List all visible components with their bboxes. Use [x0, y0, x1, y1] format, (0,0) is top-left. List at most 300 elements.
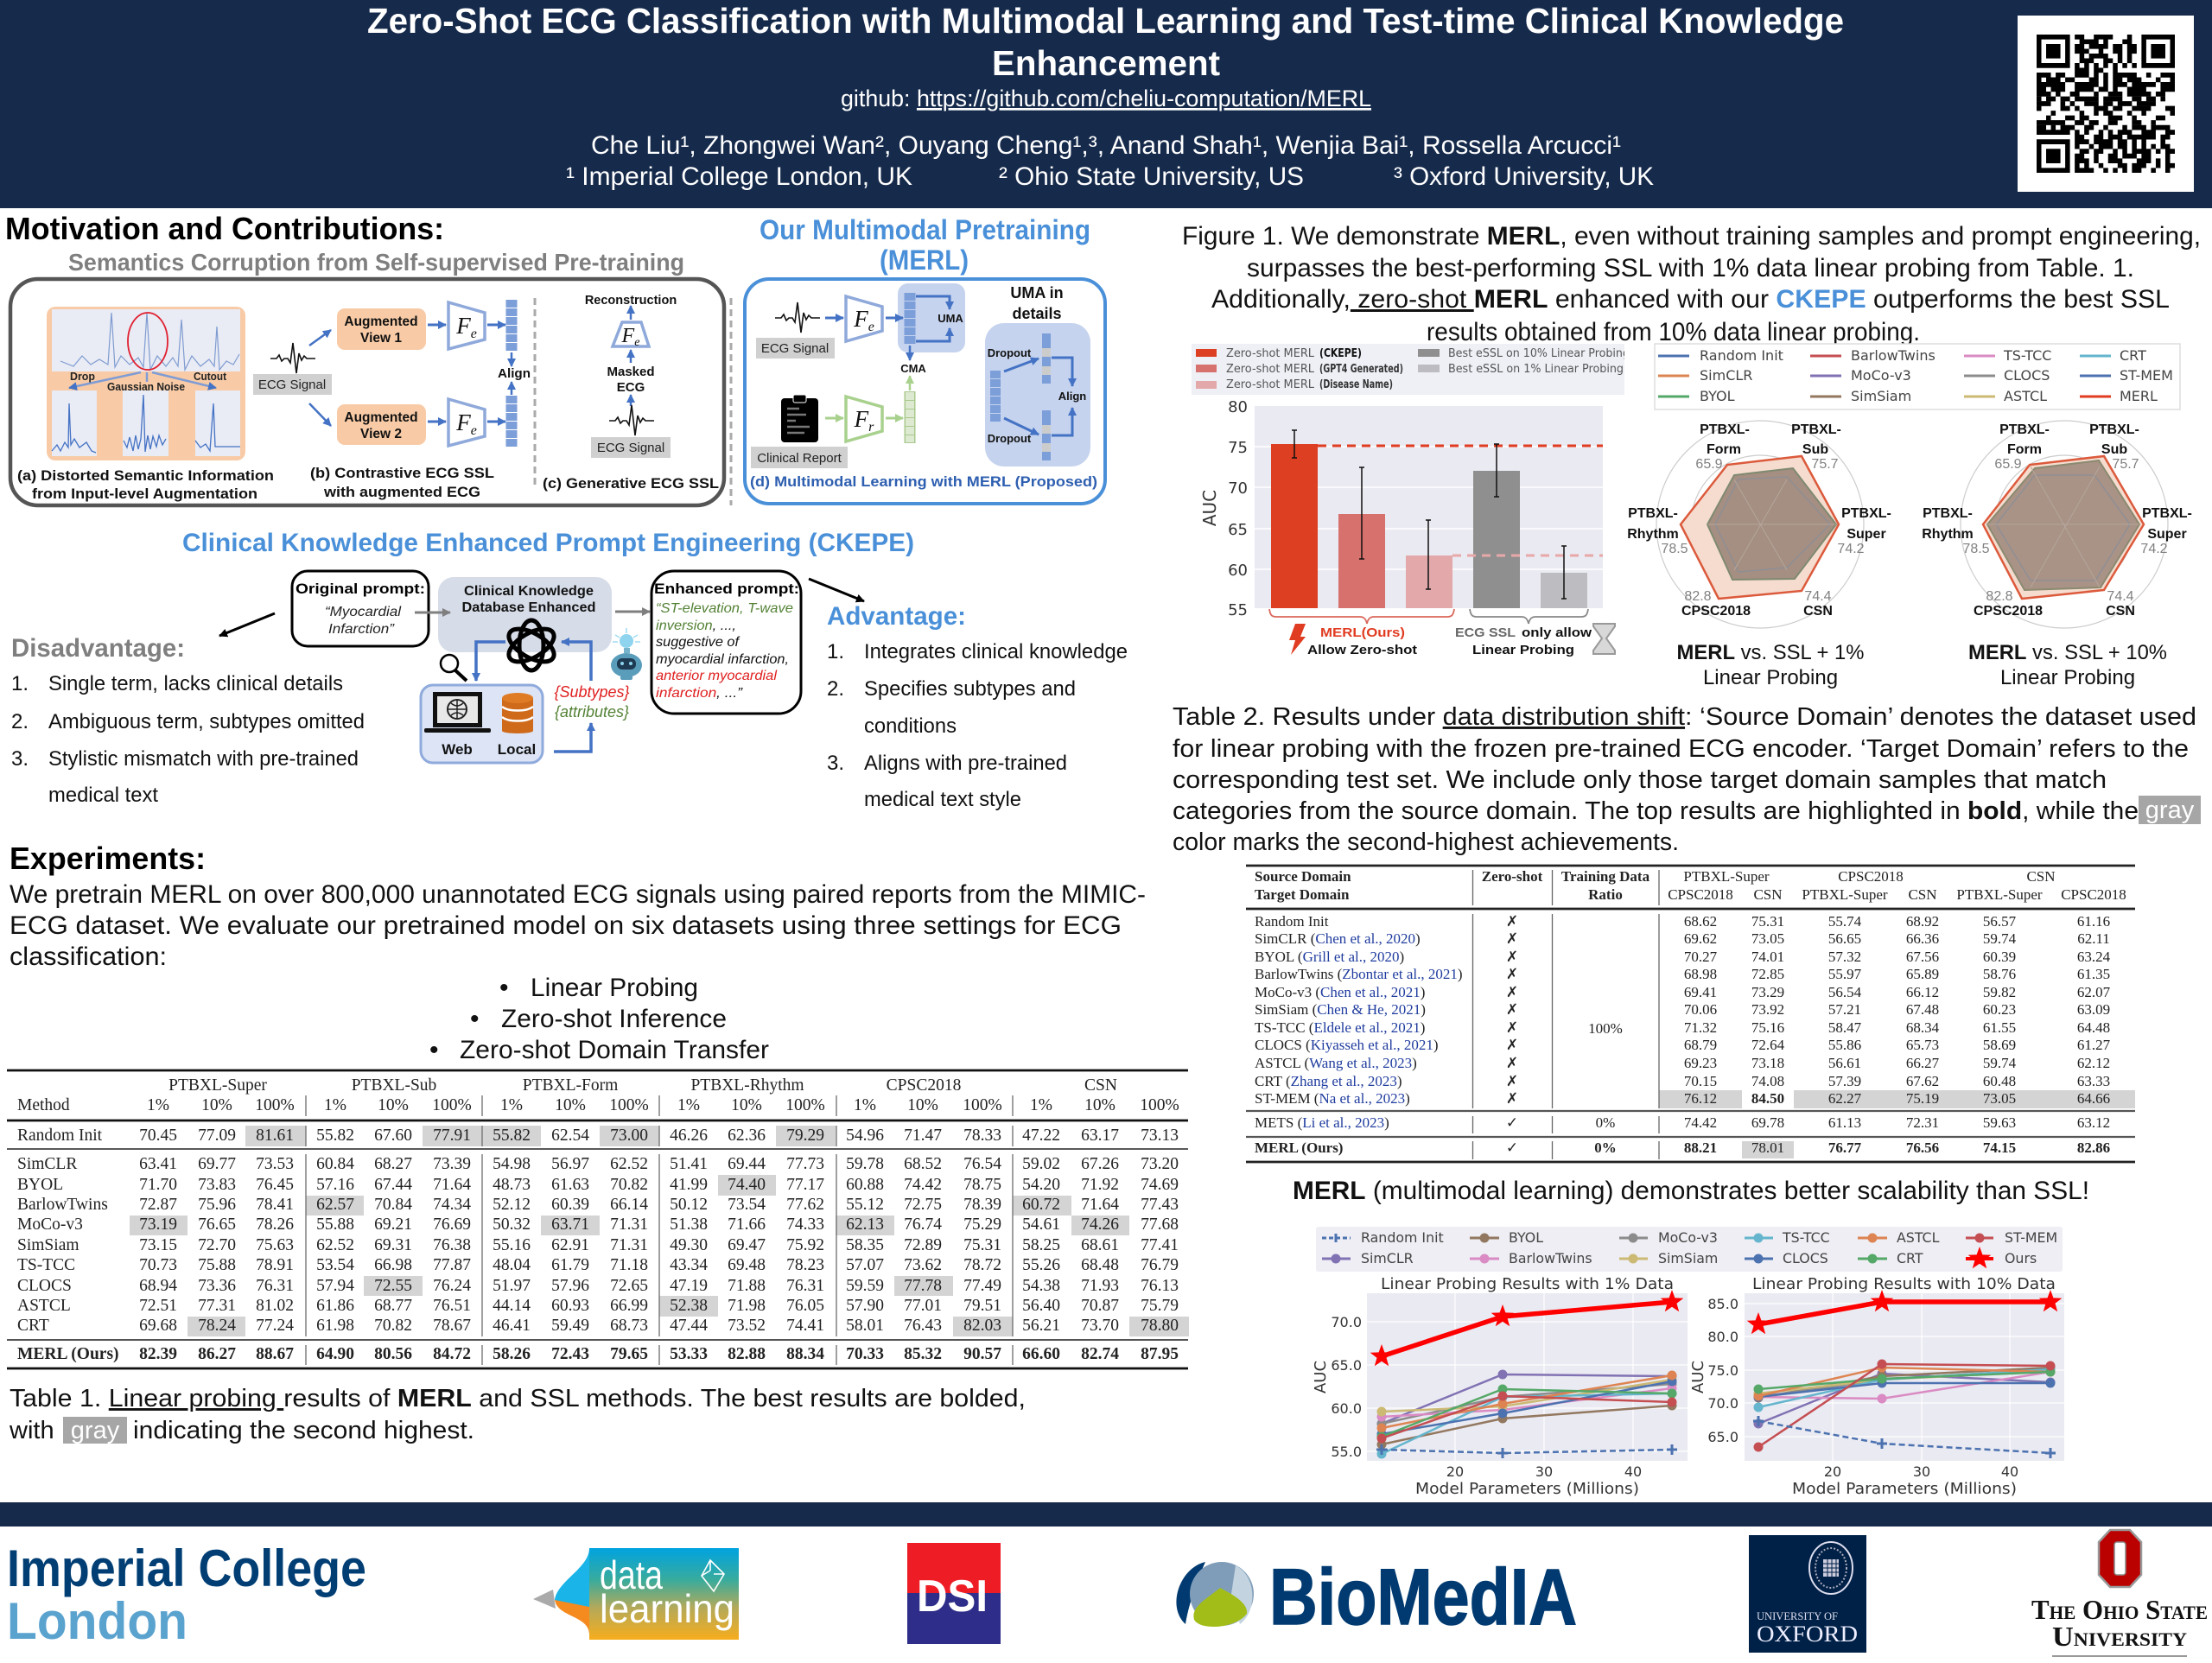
row: CRT: 59.49: [551, 1317, 589, 1335]
sub-panel (b) contrastive ECG SSL: e: [471, 423, 477, 438]
arrow to advantages: [809, 579, 864, 601]
row: MERL (ours): 58.26: [493, 1345, 531, 1363]
row: SimSiam: 72.70: [198, 1236, 236, 1254]
row: MoCo-v3: 69.21: [374, 1216, 412, 1234]
table 2 rows: BYOL (Grill et al., 2020): [1255, 949, 1404, 965]
row: MoCo-v3: 62.13: [846, 1216, 884, 1234]
table 2 header: Target Domain: [1255, 886, 1350, 903]
row: ASTCL: 77.01: [904, 1297, 942, 1315]
scalability chart legend: Random Init: [1361, 1229, 1444, 1246]
panel: multimodal learning with MERL: [745, 279, 1105, 504]
report encoder: r: [868, 420, 874, 435]
row: CLOCS: 71.93: [1081, 1277, 1119, 1295]
radar labels: Form: [2007, 442, 2042, 457]
UMA in details: Align: [1058, 390, 1086, 403]
table 2 rows: 69.62: [1684, 930, 1717, 947]
row: SimSiam: 58.35: [846, 1236, 884, 1254]
figure 1 caption: results obtained from 10% data linear probing.: [1427, 318, 1920, 346]
row: SimCLR: 68.52: [904, 1155, 942, 1173]
table 2 rows: 84.50: [1751, 1090, 1784, 1107]
row: CLOCS: 77.49: [963, 1277, 1001, 1295]
radar labels: Sub: [1802, 442, 1828, 457]
row: MoCo-v3: 71.66: [728, 1216, 766, 1234]
radar labels: Super: [1847, 527, 1886, 542]
row: ASTCL: 70.87: [1081, 1297, 1119, 1315]
poster title: [367, 1, 1844, 83]
table 2 header: CPSC2018: [1838, 868, 1904, 885]
icon: hourglass: [1593, 624, 1615, 654]
disadvantage list: Stylistic mismatch with pre-trained: [48, 747, 359, 771]
row: CRT: 78.24: [198, 1317, 236, 1335]
row: CRT: 78.80: [1141, 1317, 1179, 1335]
disadvantage list: 3.: [11, 747, 29, 771]
row: MERL (ours): 80.56: [374, 1345, 412, 1363]
row: BYOL: 70.82: [610, 1176, 648, 1194]
web and local sources: Web: [442, 741, 473, 758]
table 2 rows: ✗: [1506, 1055, 1518, 1072]
radar legend: ST-MEM: [2120, 367, 2173, 384]
row: MERL (ours): 82.88: [728, 1345, 766, 1363]
row: TS-TCC: 78.72: [963, 1256, 1001, 1274]
clinical report label: Clinical Report: [757, 451, 842, 466]
row: CRT: 77.24: [256, 1317, 294, 1335]
table 2 header: CSN: [1908, 886, 1937, 903]
row: BYOL: 74.69: [1141, 1176, 1179, 1194]
radar labels: [1627, 422, 1891, 619]
table 2 MERL row: ✓: [1506, 1139, 1518, 1157]
table 2 rows: 69.78: [1751, 1114, 1784, 1131]
radar caption 1%: Linear Probing: [1703, 666, 1838, 689]
bar chart legend: Zero-shot MERL: [1226, 363, 1315, 376]
table 2 rows: 67.62: [1906, 1073, 1939, 1089]
diagram: CKEPE workflow: [219, 571, 864, 763]
table 2 rows: 56.54: [1828, 984, 1862, 1000]
row: random init: 55.82: [316, 1127, 354, 1145]
radar labels: PTBXL-: [1628, 506, 1678, 521]
row: BYOL: 71.64: [433, 1176, 471, 1194]
row: CLOCS: 71.88: [728, 1277, 766, 1295]
row: SimSiam: 69.47: [728, 1236, 766, 1254]
row: MoCo-v3: 63.71: [551, 1216, 589, 1234]
row: MERL (ours): 82.74: [1081, 1345, 1119, 1363]
table 2 rows: 61.35: [2077, 966, 2110, 982]
subtypes and attributes labels: {attributes}: [555, 703, 629, 720]
radar legend: SimSiam: [1851, 388, 1911, 404]
enhanced prompt box: anterior myocardial: [656, 669, 777, 683]
table 2 rows: 60.39: [1983, 949, 2016, 965]
bar chart legend: (Disease Name): [1319, 378, 1393, 391]
row: MoCo-v3: 51.38: [670, 1216, 708, 1234]
row: TS-TCC: 78.91: [256, 1256, 294, 1274]
row: CLOCS: CLOCS: [17, 1277, 72, 1295]
footer bar: [0, 1502, 2212, 1527]
header rows: 100%: [432, 1096, 472, 1114]
advantage list: 3.: [827, 752, 844, 775]
icon: database: [502, 693, 533, 733]
row: CLOCS: 68.94: [139, 1277, 177, 1295]
table 2 header: Ratio: [1588, 886, 1623, 903]
report encoder: F: [855, 406, 868, 432]
bar chart group labels: Linear Probing: [1472, 643, 1574, 657]
table 1: linear probing results: [7, 1070, 1189, 1368]
table 2 rows: 57.21: [1828, 1001, 1861, 1018]
experiment settings bullets: Linear Probing: [531, 974, 698, 1002]
table 2 rows: ASTCL (Wang et al., 2023): [1255, 1055, 1417, 1071]
radar labels: PTBXL-: [1999, 422, 2050, 437]
row: MERL (ours): 88.34: [786, 1345, 824, 1363]
table 2 rows: 69.41: [1684, 984, 1717, 1000]
table 1 caption: Table 1. Linear probing results of MERL and SSL methods. The best results are bolded,: [10, 1385, 1026, 1412]
original prompt box: Original prompt:: [296, 581, 425, 597]
header rows: 10%: [555, 1096, 586, 1114]
row: SimCLR: 59.78: [846, 1155, 884, 1173]
table 2 rows: 75.19: [1906, 1090, 1939, 1107]
radar legend: SimCLR: [1700, 367, 1752, 384]
affiliations: ² Ohio State University, US: [999, 162, 1304, 191]
table 2 header: PTBXL-Super: [1956, 886, 2043, 903]
row: MoCo-v3: 76.69: [433, 1216, 471, 1234]
axes labels: 40: [1624, 1463, 1642, 1480]
radar labels: 82.8: [1986, 589, 2013, 604]
row: MoCo-v3: 77.68: [1141, 1216, 1179, 1234]
sub-panel (b) contrastive ECG SSL: View 1: [360, 331, 402, 346]
row: MERL (ours): 72.43: [551, 1345, 589, 1363]
row: BYOL: 67.44: [374, 1176, 412, 1194]
brackets: [1269, 609, 1588, 624]
disadvantage list: [11, 634, 365, 807]
row: BYOL: 71.70: [139, 1176, 177, 1194]
row: SimCLR: 73.20: [1141, 1155, 1179, 1173]
table 2 header: [1255, 868, 2126, 903]
row: random init: 62.36: [728, 1127, 766, 1145]
table 2 header: PTBXL-Super: [1802, 886, 1888, 903]
row: MERL (ours): 88.67: [256, 1345, 294, 1363]
header rows: Method: [17, 1096, 70, 1114]
scalability chart legend: Ours: [2005, 1250, 2037, 1266]
ECG encoder: [825, 293, 910, 344]
table 2 rows: 73.29: [1751, 984, 1784, 1000]
row: SimCLR: 63.41: [139, 1155, 177, 1173]
table 2 rows: 59.74: [1983, 1055, 2017, 1071]
row: CLOCS: 72.55: [374, 1277, 412, 1295]
logo: Imperial College London: Imperial College: [7, 1539, 366, 1597]
QR code: [2018, 16, 2194, 192]
table 2 rows: 60.23: [1983, 1001, 2016, 1018]
CMA block: CMA: [900, 362, 926, 375]
second-highest gray cells: [130, 1126, 1189, 1336]
radar labels: 75.7: [1811, 457, 1839, 472]
row: TS-TCC: 68.48: [1081, 1256, 1119, 1274]
row: MERL (ours): 64.90: [316, 1345, 354, 1363]
table 2 rows: 60.48: [1983, 1073, 2016, 1089]
table 2 rows: 61.13: [1828, 1114, 1861, 1131]
table 2 header: Zero-shot: [1482, 868, 1543, 885]
row: MoCo-v3: 71.31: [610, 1216, 648, 1234]
advantage list: [827, 602, 1128, 811]
row: TS-TCC: 77.87: [433, 1256, 471, 1274]
table 2 rows: METS (Li et al., 2023): [1255, 1114, 1389, 1131]
sub-panel (a) distorted semantics: Drop: [70, 370, 95, 383]
table 2 header: CSN: [1753, 886, 1783, 903]
row: BYOL: 74.42: [904, 1176, 942, 1194]
table 2 rows: 0%: [1596, 1114, 1615, 1131]
scalability chart legend: ASTCL: [1897, 1229, 1940, 1246]
radar caption 10%: Linear Probing: [2000, 666, 2135, 689]
y axis: 55: [1228, 601, 1248, 619]
icon: lightning bolt: [1289, 624, 1306, 655]
table 2 rows: 62.07: [2077, 984, 2111, 1000]
table 2 rows: [1255, 913, 2111, 1132]
row: SimCLR: SimCLR: [17, 1155, 77, 1173]
table 1 caption: with: [9, 1417, 54, 1444]
table 2 rows: 75.16: [1751, 1019, 1784, 1036]
table 2 MERL row: 76.56: [1906, 1139, 1939, 1156]
row: CRT: 61.98: [316, 1317, 354, 1335]
table 2 rows: 67.48: [1906, 1001, 1939, 1018]
data series: [1376, 1302, 1677, 1458]
UMA in details: UMA in: [1010, 284, 1064, 301]
header rows: 100%: [963, 1096, 1002, 1114]
row: BarlowTwins: 50.12: [670, 1196, 708, 1214]
gray arrows: [415, 612, 650, 613]
row: CRT: 68.73: [610, 1317, 648, 1335]
row: BarlowTwins: 60.39: [551, 1196, 589, 1214]
row: BarlowTwins: [17, 1196, 1179, 1214]
table 2 header: CPSC2018: [1668, 886, 1733, 903]
row: CLOCS: 72.65: [610, 1277, 648, 1295]
scalability chart legend: SimSiam: [1658, 1250, 1718, 1266]
row: random init: 81.61: [256, 1127, 294, 1145]
experiments paragraph: classification:: [10, 943, 167, 971]
sub-panel (c) generative ECG SSL: ECG: [617, 380, 645, 395]
table 2 rows: 55.74: [1828, 913, 1862, 930]
row: SimCLR: 69.44: [728, 1155, 766, 1173]
header rows: 10%: [201, 1096, 232, 1114]
table 2 rows: 75.31: [1751, 913, 1784, 930]
scalability chart legend: ST-MEM: [2005, 1229, 2057, 1246]
radar labels: CSN: [2106, 604, 2135, 619]
row: BarlowTwins: 75.96: [198, 1196, 236, 1214]
clinical knowledge database: Database Enhanced: [461, 600, 596, 615]
axes labels: 20: [1824, 1463, 1841, 1480]
row: SimSiam: 62.52: [316, 1236, 354, 1254]
table 2 caption: Table 2. Results under data distribution shift : ‘Source Domain’ denotes the dataset used: [1173, 703, 2196, 731]
row: CLOCS: 47.19: [670, 1277, 708, 1295]
row: ASTCL: 52.38: [670, 1297, 708, 1315]
table 2 rows: 63.24: [2077, 949, 2111, 965]
table 2 header: PTBXL-Super: [1683, 868, 1770, 885]
table 2 rows: 61.16: [2077, 913, 2110, 930]
table 2 MERL row: 0%: [1594, 1139, 1617, 1156]
experiment settings bullets: •: [470, 1005, 480, 1033]
row: SimSiam: 69.31: [374, 1236, 412, 1254]
radar labels: Rhythm: [1627, 527, 1679, 542]
row: SimCLR: 51.41: [670, 1155, 708, 1173]
row: CRT: 73.52: [728, 1317, 766, 1335]
figure 1 caption: Figure 1. We demonstrate MERL, even without training samples and prompt engineering,: [1182, 222, 2201, 251]
table 2 MERL row: [1255, 1139, 2110, 1157]
row: CRT: 74.41: [786, 1317, 824, 1335]
caption (b): (b) Contrastive ECG SSL: [310, 465, 494, 481]
gray cells: [1659, 1090, 2135, 1158]
row: CRT: 73.70: [1081, 1317, 1119, 1335]
UMA in details: Dropout: [988, 346, 1032, 359]
row: ASTCL: 71.98: [728, 1297, 766, 1315]
line chart: linear probing with 10% data: [1689, 1276, 2064, 1498]
header rows: 100%: [255, 1096, 295, 1114]
row: ASTCL: 60.93: [551, 1297, 589, 1315]
icon: OpenAI knot: [504, 620, 559, 670]
row: SimCLR: [17, 1155, 1179, 1173]
row: ASTCL: ASTCL: [17, 1297, 71, 1315]
row: random init: 55.82: [493, 1127, 531, 1145]
logo: The Ohio State University: University: [2052, 1621, 2187, 1652]
row: BarlowTwins: 62.57: [316, 1196, 354, 1214]
row: BYOL: 54.20: [1022, 1176, 1060, 1194]
header rows: 1%: [147, 1096, 169, 1114]
advantage list: Advantage:: [827, 602, 966, 631]
row: SimCLR: 67.26: [1081, 1155, 1119, 1173]
table 2 rows: ✗: [1506, 984, 1518, 1001]
bar chart legend: Best eSSL on 1% Linear Probing: [1448, 363, 1624, 376]
radar caption 10%: [1968, 641, 2167, 689]
table 2 rows: 66.27: [1906, 1055, 1940, 1071]
radar legend: TS-TCC: [2003, 347, 2051, 364]
table 2 rows: 74.01: [1751, 949, 1784, 965]
row: SimSiam: 71.31: [610, 1236, 648, 1254]
header rows: 100%: [1140, 1096, 1179, 1114]
ECG signal input: ECG Signal: [761, 341, 829, 356]
enhanced prompt box: infarction , ...”: [656, 686, 743, 701]
row: ASTCL: 76.05: [786, 1297, 824, 1315]
row: random init: 54.96: [846, 1127, 884, 1145]
row: MERL (ours): 53.33: [670, 1345, 708, 1363]
row: MERL (ours): [17, 1345, 1179, 1363]
logo: data learning: learning: [600, 1586, 734, 1631]
panel: self-supervised approaches: [10, 279, 724, 505]
authors: Che Liu¹, Zhongwei Wan², Ouyang Cheng¹,³, Anand Shah¹, Wenjia Bai¹, Rossella Arcucci¹: [591, 131, 1621, 160]
axes labels: 55.0: [1331, 1444, 1362, 1460]
heading: our multimodal pretraining: [760, 214, 1090, 276]
advantage list: 1.: [827, 640, 844, 663]
sub-panel (b) contrastive ECG SSL: Augmented: [344, 314, 418, 329]
experiment settings bullets: [429, 974, 769, 1064]
icon: clinical report clipboard: [781, 395, 818, 442]
row: ASTCL: 61.86: [316, 1297, 354, 1315]
table 2 rows: 69.23: [1684, 1055, 1717, 1071]
table 2 ratio cell: 100%: [1588, 1020, 1623, 1037]
radar labels: 74.4: [2107, 589, 2134, 604]
row: MoCo-v3: 74.33: [786, 1216, 824, 1234]
axes labels: 80.0: [1707, 1329, 1738, 1345]
row: MoCo-v3: 50.32: [493, 1216, 531, 1234]
sub-panel (b) contrastive ECG SSL: ECG Signal: [258, 378, 326, 392]
experiments paragraph: ECG dataset. We evaluate our pretrained model on six datasets using three settings for ECG: [10, 911, 1122, 940]
row: TS-TCC: 70.73: [139, 1256, 177, 1274]
radar legend: MoCo-v3: [1851, 367, 1911, 384]
row: CRT: 56.21: [1022, 1317, 1060, 1335]
radar chart: MERL vs SSL + 1%: [1627, 421, 1891, 628]
clinical knowledge database: [438, 577, 612, 652]
row: TS-TCC: 69.48: [728, 1256, 766, 1274]
radar labels: CPSC2018: [1974, 604, 2043, 619]
subheading: semantics corruption: Semantics Corruption from Self-supervised Pre-training: [68, 249, 684, 276]
row: CLOCS: [17, 1277, 1179, 1295]
scalability chart legend: BYOL: [1509, 1229, 1543, 1246]
table 2 MERL row: 88.21: [1684, 1139, 1717, 1156]
row: MERL (ours): 84.72: [433, 1345, 471, 1363]
table 2 MERL row: MERL (Ours): [1255, 1139, 1343, 1156]
table 2 MERL row: 82.86: [2077, 1139, 2110, 1156]
row: CLOCS: 51.97: [493, 1277, 531, 1295]
bar chart group labels: Allow Zero-shot: [1307, 643, 1417, 657]
table 2 rows: 59.82: [1983, 984, 2016, 1000]
table 2 rows: 76.12: [1684, 1090, 1717, 1107]
scalability chart legend: [1316, 1227, 2063, 1272]
radar labels: Rhythm: [1922, 527, 1974, 542]
github link: github: https://github.com/cheliu-computation/MERL: [841, 86, 1371, 111]
row: BarlowTwins: 60.72: [1022, 1196, 1060, 1214]
row: SimCLR: 59.02: [1022, 1155, 1060, 1173]
table 2 rows: 72.85: [1751, 966, 1784, 982]
row: CLOCS: 76.24: [433, 1277, 471, 1295]
row: TS-TCC: 71.18: [610, 1256, 648, 1274]
table 2 rows: 68.34: [1906, 1019, 1940, 1036]
clinical report label: [751, 447, 848, 468]
row: SimCLR: 77.73: [786, 1155, 824, 1173]
row: TS-TCC: 78.23: [786, 1256, 824, 1274]
table 2 rows: 59.63: [1983, 1114, 2016, 1131]
axes labels: 30: [1913, 1463, 1930, 1480]
row: MERL (ours): 90.57: [963, 1345, 1001, 1363]
UMA block: [916, 296, 963, 341]
caption (b): with augmented ECG: [323, 484, 480, 500]
scalability chart legend: CLOCS: [1783, 1250, 1828, 1266]
advantage list: Specifies subtypes and: [864, 677, 1076, 701]
y axis: 80: [1228, 398, 1248, 416]
row: SimSiam: 75.63: [256, 1236, 294, 1254]
row: ASTCL: 66.99: [610, 1297, 648, 1315]
poster title: Enhancement: [992, 43, 1220, 83]
row: ASTCL: 75.79: [1141, 1297, 1179, 1315]
logo: BioMedIA: BioMedIA: [1269, 1553, 1577, 1641]
radar labels: PTBXL-: [1700, 422, 1750, 437]
radar labels: Super: [2147, 527, 2187, 542]
table 2 rows: 68.62: [1684, 913, 1717, 930]
table 2 header: Source Domain: [1255, 868, 1351, 885]
row: MoCo-v3: [17, 1216, 1179, 1234]
UMA in details: [988, 284, 1086, 460]
table 2 rows: ✗: [1506, 913, 1518, 930]
sub-panel (b) contrastive ECG SSL: F: [456, 313, 471, 339]
header rows: 1%: [324, 1096, 346, 1114]
bar chart legend: Best eSSL on 10% Linear Probing: [1448, 347, 1630, 360]
row: TS-TCC: TS-TCC: [17, 1256, 75, 1274]
row: SimCLR: 62.52: [610, 1155, 648, 1173]
logo: University of Oxford: OXFORD: [1757, 1622, 1858, 1647]
row: TS-TCC: 55.26: [1022, 1256, 1060, 1274]
axes labels: [1312, 1314, 1642, 1498]
row: SimCLR: 56.97: [551, 1155, 589, 1173]
row: CRT: [17, 1317, 1179, 1335]
row: CLOCS: 73.36: [198, 1277, 236, 1295]
header rows: PTBXL-Super: [168, 1076, 267, 1095]
axes labels: 75.0: [1707, 1362, 1738, 1379]
sub-panel (b) contrastive ECG SSL: Augmented: [344, 410, 418, 425]
row: random init: 46.26: [670, 1127, 708, 1145]
table 2 rows: 58.76: [1983, 966, 2016, 982]
affiliations: [566, 162, 1654, 191]
